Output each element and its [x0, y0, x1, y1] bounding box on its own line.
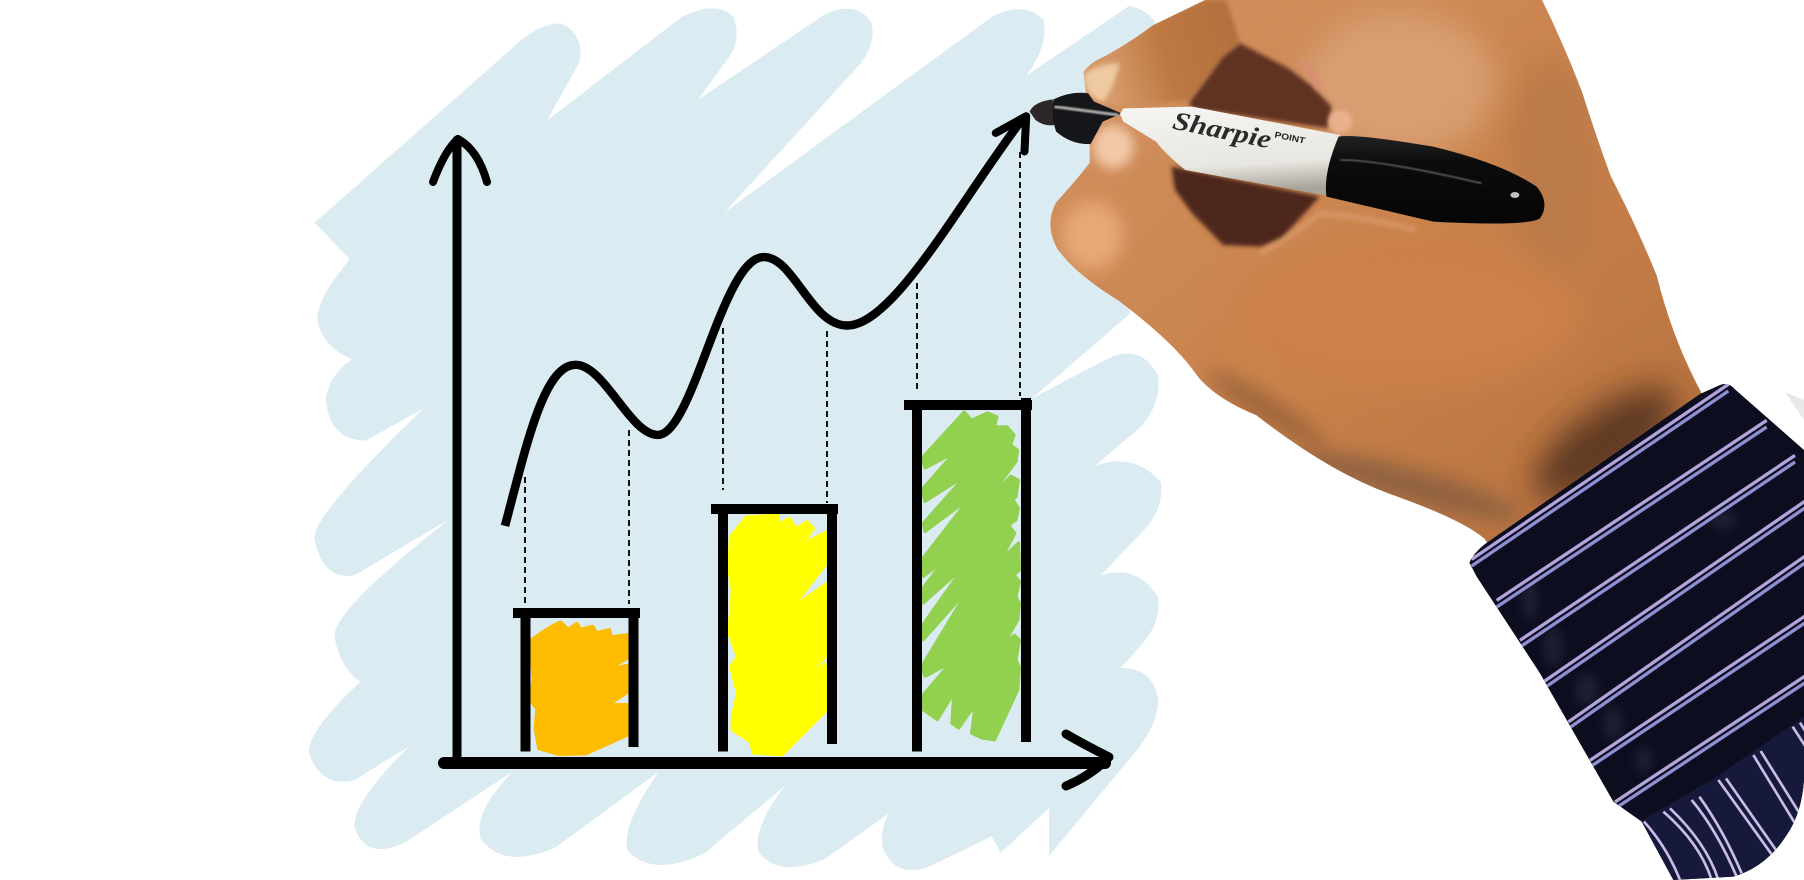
web highlight: [1328, 110, 1352, 133]
background: pale blue scribble: [309, 6, 1161, 870]
trend line with arrow: [505, 116, 1026, 526]
chart: bars with trend line: [433, 116, 1109, 786]
bar fills: [530, 412, 1020, 755]
sleeve stripes: [1644, 723, 1804, 880]
y axis arrow: [433, 139, 487, 757]
marker fine point label: POINT: [1274, 130, 1307, 146]
shadow below marker: [1172, 167, 1320, 247]
faint smudge at right edge: [1785, 392, 1804, 420]
inner sleeve: [1640, 717, 1804, 880]
marker grip highlight: [1054, 107, 1118, 115]
cap highlight: [1340, 160, 1481, 183]
marker barrel: [1120, 107, 1340, 196]
dashed guide lines: [525, 152, 1020, 606]
index finger: [1084, 0, 1240, 107]
bar fill: yellow: [729, 515, 827, 755]
cuff: [1440, 380, 1804, 880]
marker tip: [1030, 99, 1054, 125]
x axis arrow: [444, 734, 1109, 786]
cap end glint: [1510, 192, 1519, 198]
pink crease: [1299, 60, 1320, 90]
marker grip: [1053, 93, 1122, 144]
bar fill: orange: [530, 623, 631, 754]
hand, marker and cuff: [1026, 0, 1804, 880]
shadow above marker: [1189, 43, 1332, 128]
marker cap: [1326, 136, 1544, 224]
marker: [1030, 93, 1544, 224]
hand: [1050, 0, 1702, 542]
marker logo: Sharpie: [1170, 105, 1275, 154]
bar fill: green: [921, 412, 1020, 740]
cuff stripes: [1472, 384, 1804, 809]
cuff wear marks: [1522, 510, 1737, 773]
palm crease: [1261, 213, 1416, 253]
thumb highlight: [1092, 125, 1134, 168]
bar outlines: [513, 398, 1032, 752]
index fingernail: [1084, 63, 1120, 102]
finger details: [1084, 0, 1416, 253]
